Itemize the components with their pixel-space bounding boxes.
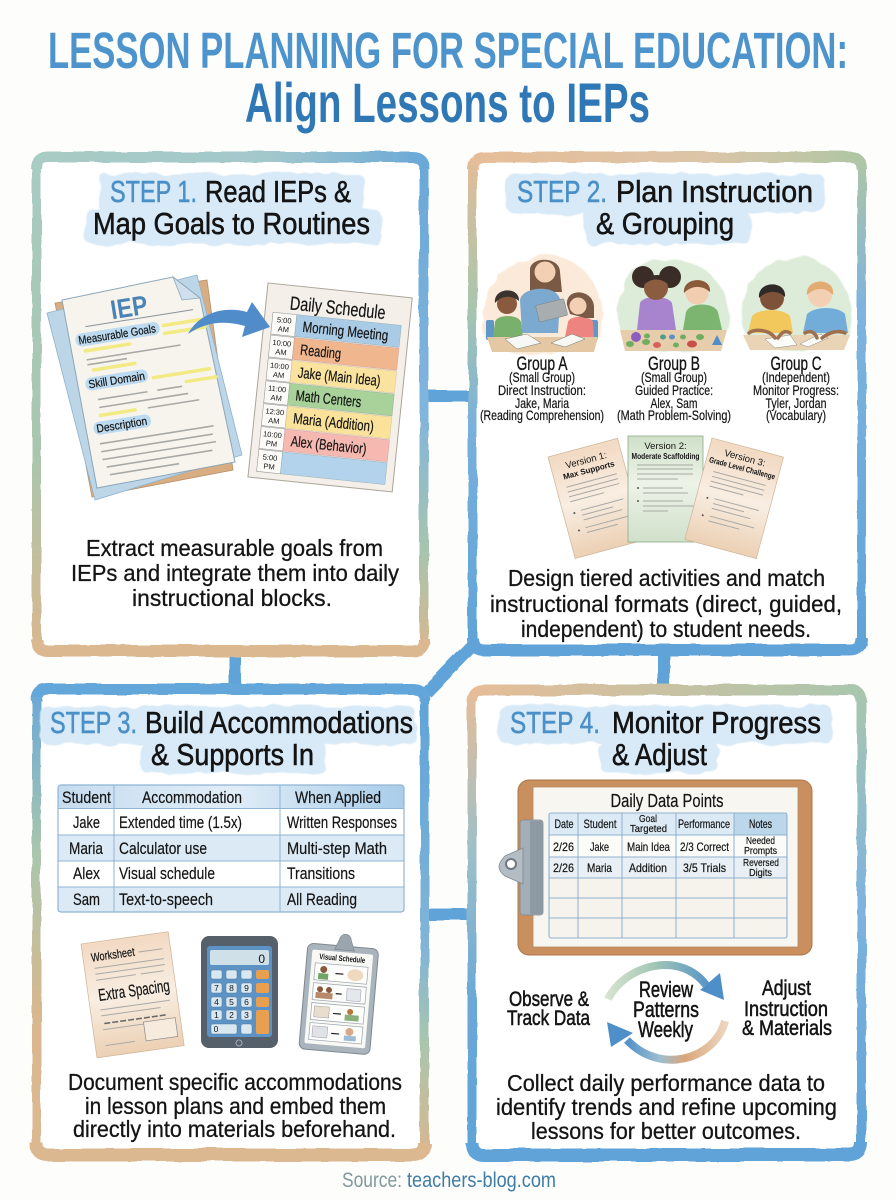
cycle diagram bbox=[507, 965, 832, 1060]
illustration: visual schedule clipboard: Visual Schedule bbox=[319, 952, 366, 965]
heading: step 2: STEP 2. bbox=[517, 174, 607, 209]
worksheet: version 3: Grade Level Challenge bbox=[708, 455, 777, 482]
illustration: daily schedule: Daily Schedule bbox=[289, 293, 387, 324]
description: step 4: lessons for better outcomes. bbox=[531, 1118, 801, 1144]
heading: step 3: & Supports In bbox=[151, 737, 314, 772]
heading highlight bbox=[507, 174, 825, 244]
worksheet: version 1 bbox=[548, 438, 645, 558]
cycle label: observe bbox=[507, 987, 590, 1030]
description: step 2 bbox=[490, 565, 842, 642]
schedule row: empty bbox=[257, 449, 387, 485]
label: group C: (Vocabulary) bbox=[766, 407, 826, 423]
illustration: daily schedule bbox=[248, 283, 412, 492]
description: step 3: in lesson plans and embed them bbox=[85, 1093, 386, 1119]
heading: step 4: STEP 4. bbox=[510, 705, 600, 740]
heading: step 4 bbox=[510, 705, 821, 772]
schedule row: reading bbox=[268, 335, 399, 370]
cycle centre label bbox=[633, 977, 699, 1042]
clipboard with data table bbox=[499, 780, 812, 955]
data table: Date bbox=[554, 817, 574, 831]
data table: Targeted bbox=[630, 823, 667, 835]
data table: Prompts bbox=[744, 845, 777, 857]
data table bbox=[549, 813, 787, 938]
schedule row: jake: AM bbox=[273, 370, 285, 380]
heading: step 1: Read IEPs & bbox=[205, 174, 351, 209]
illustration: calculator: 8 bbox=[229, 983, 234, 993]
illustration: calculator: 5 bbox=[229, 997, 234, 1007]
schedule row: alex: Alex (Behavior) bbox=[290, 433, 367, 458]
label: group A: Direct Instruction: bbox=[498, 382, 586, 398]
data table: Maria bbox=[587, 861, 612, 875]
frame: step 3 bbox=[36, 689, 424, 1155]
table rows: Text-to-speech bbox=[119, 890, 213, 909]
schedule row: alex: PM bbox=[265, 439, 278, 449]
cycle label: adjust: & Materials bbox=[742, 1016, 832, 1040]
IEP text content: Measurable Goals bbox=[78, 323, 157, 347]
table rows: Sam bbox=[73, 890, 100, 909]
heading: step 3: STEP 3. bbox=[50, 705, 137, 740]
schedule row: morning meeting: Morning Meeting bbox=[302, 319, 389, 345]
title line 2: Align Lessons to IEPs bbox=[245, 71, 650, 134]
worksheet: version 3 bbox=[685, 438, 783, 559]
clipboard with data table: Daily Data Points bbox=[610, 791, 724, 811]
source line: Source: bbox=[342, 1169, 402, 1192]
label: group B: (Math Problem-Solving) bbox=[617, 407, 731, 423]
data table: 2/3 Correct bbox=[680, 840, 730, 854]
tiered worksheets bbox=[548, 436, 783, 559]
schedule row: alex bbox=[259, 427, 390, 462]
schedule row: maria: Maria (Addition) bbox=[292, 410, 375, 436]
table rows: Visual schedule bbox=[119, 864, 215, 883]
table header: Accommodation bbox=[142, 788, 242, 807]
heading highlight bbox=[84, 174, 382, 244]
source line: teachers-blog.com bbox=[407, 1169, 556, 1192]
cycle arrow: bottom bbox=[607, 1021, 725, 1060]
worksheet: version 1: Max Supports bbox=[562, 459, 616, 482]
label: group A bbox=[480, 354, 604, 423]
label: group C: Group C bbox=[770, 354, 822, 375]
description: step 1: IEPs and integrate them into daily bbox=[71, 560, 399, 586]
description: step 4: identify trends and refine upcoming bbox=[496, 1094, 837, 1120]
schedule row: math centers: 11:00 bbox=[268, 384, 287, 394]
description: step 2: Design tiered activities and match bbox=[508, 565, 825, 591]
schedule row: jake: 10:00 bbox=[270, 361, 289, 372]
cycle label: adjust: Adjust bbox=[762, 976, 811, 1000]
label: group A: (Small Group) bbox=[509, 369, 575, 385]
heading: step 2 bbox=[517, 174, 813, 241]
label: group B: Alex, Sam bbox=[650, 395, 698, 411]
label: group C: (Independent) bbox=[762, 369, 830, 385]
label: group B bbox=[617, 354, 731, 423]
source line bbox=[342, 1169, 556, 1192]
schedule row: maria bbox=[261, 404, 392, 439]
table header: When Applied bbox=[295, 788, 381, 807]
schedule row: reading: Reading bbox=[299, 342, 342, 363]
illustration: calculator: 4 bbox=[214, 997, 219, 1007]
illustration: calculator: 1 bbox=[214, 1010, 219, 1020]
frame: step 1 bbox=[36, 157, 424, 651]
illustration: IEP document stack bbox=[47, 275, 242, 500]
table rows: Multi-step Math bbox=[287, 839, 387, 858]
schedule row: reading: 10:00 bbox=[272, 338, 292, 349]
schedule row: jake: Jake (Main Idea) bbox=[297, 365, 381, 390]
IEP text content bbox=[69, 281, 228, 477]
worksheet: version 1: Version 1: bbox=[564, 450, 608, 472]
panel: step 4 bbox=[472, 690, 862, 1155]
schedule row: empty: 5:00 bbox=[262, 452, 278, 463]
illustration: group C bbox=[742, 257, 852, 350]
data table: Notes bbox=[749, 817, 772, 831]
connectors between panels bbox=[229, 390, 670, 921]
heading: step 1 bbox=[93, 174, 370, 241]
cycle label: adjust: Instruction bbox=[744, 997, 828, 1021]
label: group A: Jake, Maria bbox=[515, 395, 569, 411]
worksheet: version 2 bbox=[628, 436, 703, 542]
description: step 4: Collect daily performance data to bbox=[507, 1070, 825, 1096]
label: group C: Monitor Progress: bbox=[753, 382, 839, 398]
data table: Needed bbox=[746, 835, 775, 847]
schedule row: empty: PM bbox=[263, 462, 275, 472]
description: step 3 bbox=[68, 1069, 402, 1142]
schedule row: morning meeting: AM bbox=[277, 324, 289, 334]
worksheet: version 2: Moderate Scaffolding bbox=[632, 452, 700, 461]
label: group B: Guided Practice: bbox=[635, 382, 713, 398]
data table: Reversed bbox=[743, 857, 779, 869]
table rows: Extended time (1.5x) bbox=[119, 813, 242, 832]
table rows: Maria bbox=[69, 839, 103, 858]
arrow: IEP to schedule bbox=[188, 302, 270, 337]
heading highlight bbox=[499, 706, 833, 773]
illustration: calculator bbox=[201, 936, 278, 1048]
illustration: visual schedule clipboard bbox=[299, 931, 380, 1055]
description: step 1: instructional blocks. bbox=[132, 585, 332, 611]
data table: Digits bbox=[749, 867, 772, 879]
schedule row: maria: 12:30 bbox=[265, 406, 285, 417]
schedule row: morning meeting bbox=[271, 312, 401, 347]
schedule row: math centers bbox=[264, 381, 394, 416]
data table: Jake bbox=[590, 840, 609, 854]
illustration: calculator: 0 bbox=[258, 952, 265, 966]
illustration: calculator: 9 bbox=[244, 983, 249, 993]
illustration: calculator: 6 bbox=[244, 997, 249, 1007]
illustration: extra spacing worksheet bbox=[81, 932, 184, 1058]
data table: Performance bbox=[678, 817, 730, 831]
schedule row: jake bbox=[266, 358, 397, 393]
IEP text content: Skill Domain bbox=[88, 371, 146, 391]
illustration: extra spacing worksheet: Extra Spacing bbox=[97, 976, 171, 1005]
data table: 2/26 bbox=[553, 840, 574, 854]
description: step 2: independent) to student needs. bbox=[521, 616, 811, 642]
table header bbox=[62, 788, 381, 807]
table rows: Jake bbox=[73, 813, 100, 832]
illustration: calculator: 3 bbox=[244, 1010, 249, 1020]
table rows: Written Responses bbox=[287, 813, 397, 832]
heading: step 1: STEP 1. bbox=[110, 174, 197, 209]
schedule row: maria: AM bbox=[268, 416, 280, 426]
illustration: calculator: 2 bbox=[229, 1010, 234, 1020]
label: group A: (Reading Comprehension) bbox=[480, 407, 604, 423]
description: step 1 bbox=[71, 535, 399, 611]
frame: step 2 bbox=[472, 157, 862, 650]
data table: Student bbox=[584, 817, 617, 831]
frame: step 4 bbox=[472, 690, 862, 1155]
panel: step 1 bbox=[36, 157, 424, 651]
label: group B: (Small Group) bbox=[641, 369, 707, 385]
illustration: calculator: 0 bbox=[214, 1024, 219, 1034]
description: step 4 bbox=[496, 1070, 837, 1144]
illustration: group A bbox=[482, 254, 603, 355]
label: group C: Tyler, Jordan bbox=[766, 395, 826, 411]
table header: Student bbox=[62, 788, 111, 807]
description: step 3: Document specific accommodations bbox=[68, 1069, 402, 1095]
illustration: group B bbox=[618, 260, 728, 351]
IEP text content: IEP bbox=[108, 290, 150, 325]
worksheet: version 2: Version 2: bbox=[644, 441, 687, 452]
panel: step 3 bbox=[36, 689, 424, 1155]
heading: step 3: Build Accommodations bbox=[145, 705, 413, 740]
title bbox=[48, 22, 848, 134]
description: step 3: directly into materials beforehand. bbox=[73, 1116, 396, 1142]
cycle label: observe: Observe & bbox=[509, 987, 589, 1011]
cycle centre label: Patterns bbox=[633, 997, 699, 1022]
description: step 2: instructional formats (direct, guided, bbox=[490, 591, 842, 617]
heading: step 1: Map Goals to Routines bbox=[93, 206, 370, 241]
accommodations table bbox=[58, 785, 404, 912]
metal clip bbox=[499, 820, 543, 915]
cycle label: adjust bbox=[742, 976, 832, 1040]
schedule row: reading: AM bbox=[275, 347, 287, 357]
table rows: Alex bbox=[73, 864, 100, 883]
data table: 3/5 Trials bbox=[683, 861, 726, 875]
heading: step 2: Plan Instruction bbox=[616, 174, 813, 209]
label: group B: Group B bbox=[648, 354, 700, 375]
schedule row: math centers: Math Centers bbox=[295, 387, 362, 411]
description: step 1: Extract measurable goals from bbox=[86, 535, 383, 561]
heading: step 4: Monitor Progress bbox=[612, 705, 821, 740]
schedule row: morning meeting: 5:00 bbox=[277, 315, 292, 326]
cycle centre label: Review bbox=[639, 977, 693, 1002]
table rows: Calculator use bbox=[119, 839, 207, 858]
label: group C bbox=[753, 354, 839, 423]
table rows bbox=[69, 813, 397, 909]
illustration: extra spacing worksheet: Worksheet bbox=[90, 945, 136, 965]
cycle arrow: top bbox=[608, 965, 724, 1000]
data table: 2/26 bbox=[553, 861, 574, 875]
table rows: All Reading bbox=[287, 890, 357, 909]
data table: Goal bbox=[639, 813, 657, 825]
heading: step 4: & Adjust bbox=[612, 737, 707, 772]
IEP text content: Description bbox=[96, 416, 148, 436]
heading: step 2: & Grouping bbox=[596, 206, 734, 241]
label: group A: Group A bbox=[516, 354, 568, 375]
data table: Addition bbox=[629, 861, 667, 875]
cycle label: observe: Track Data bbox=[507, 1006, 590, 1030]
heading highlight bbox=[40, 706, 416, 773]
heading: step 3 bbox=[50, 705, 413, 772]
schedule row: alex: 10:00 bbox=[263, 429, 282, 440]
worksheet: version 3: Version 3: bbox=[723, 448, 767, 469]
table rows: Transitions bbox=[287, 864, 355, 883]
data table: Main Idea bbox=[627, 840, 670, 854]
schedule row: math centers: AM bbox=[270, 393, 282, 403]
cycle centre label: Weekly bbox=[638, 1017, 693, 1042]
panel: step 2 bbox=[472, 157, 862, 650]
illustration: calculator: 7 bbox=[214, 983, 219, 993]
